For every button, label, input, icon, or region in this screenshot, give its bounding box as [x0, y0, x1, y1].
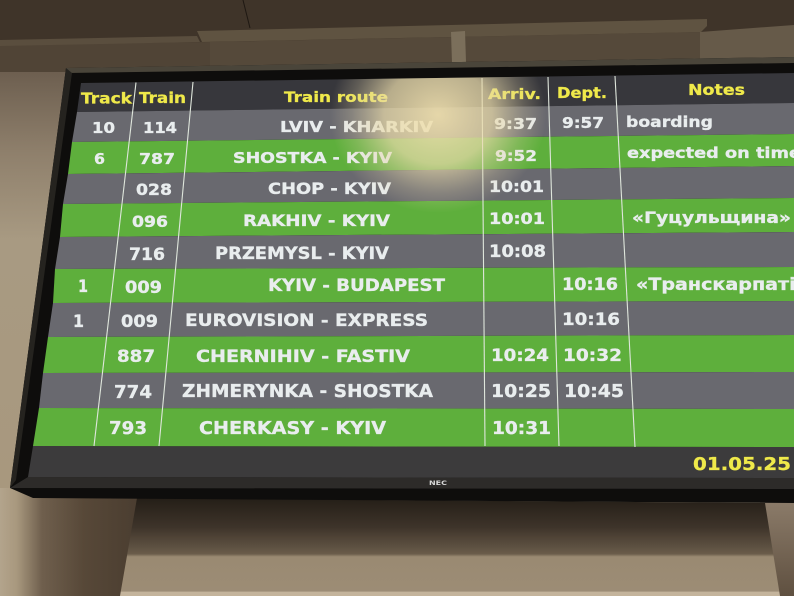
header row: Train — [139, 89, 186, 107]
row 4: 10:01 — [489, 209, 545, 228]
row 3: 028 — [136, 180, 172, 199]
ceiling seam — [243, 0, 250, 28]
header row — [77, 73, 794, 112]
row 5: 716 — [129, 245, 165, 264]
row 9: 10:45 — [564, 382, 624, 402]
row 1: 9:57 — [562, 114, 604, 132]
row 10: 793 — [109, 418, 147, 439]
row 1: 114 — [143, 119, 177, 137]
row 2: 787 — [139, 150, 175, 168]
row 4: RAKHIV - KYIV — [243, 211, 391, 230]
header row: Arriv. — [488, 87, 541, 103]
lower left wall in shadow — [0, 488, 140, 596]
row 1: LVIV - KHARKIV — [280, 118, 433, 136]
row 7: 009 — [121, 312, 158, 332]
row 6: «Транскарпаті» — [636, 275, 794, 294]
row 10: CHERKASY - KYIV — [199, 418, 386, 439]
board table — [33, 73, 794, 447]
row 4: «Гуцульщина» — [632, 208, 791, 227]
header row: Notes — [688, 81, 745, 99]
row 1 — [72, 103, 794, 142]
row 5 — [55, 232, 794, 269]
ceiling — [0, 0, 794, 46]
row 1: boarding — [626, 113, 713, 131]
brand logo: NEC — [429, 479, 447, 487]
row 8: 887 — [117, 347, 155, 367]
row 3: CHOP - KYIV — [268, 179, 392, 198]
row 9: 10:25 — [491, 382, 551, 402]
row 1: 10 — [92, 119, 115, 137]
bracket — [451, 31, 466, 63]
row 2: 6 — [94, 150, 105, 168]
row 5: PRZEMYSL - KYIV — [215, 244, 389, 263]
date: 01.05.25 — [693, 454, 791, 475]
row 6: 1 — [78, 277, 88, 296]
lower wall panel — [120, 498, 780, 596]
row 1: 9:37 — [494, 115, 537, 133]
row 4 — [60, 198, 794, 237]
row 10: 10:31 — [492, 418, 551, 439]
row 7: 10:16 — [562, 310, 620, 330]
row 2: expected on time — [627, 144, 794, 162]
row 7: EUROVISION - EXPRESS — [185, 311, 428, 331]
row 5: 10:08 — [489, 242, 546, 261]
row 2: SHOSTKA - KYIV — [233, 149, 392, 167]
screen glare — [334, 76, 541, 208]
monitor bezel — [10, 57, 794, 503]
row 7 — [48, 301, 794, 337]
header row: Track — [81, 90, 133, 108]
column divider lines — [94, 76, 635, 447]
right wall — [760, 500, 794, 596]
row 8: 10:32 — [563, 346, 622, 366]
header row: Dept. — [557, 84, 607, 102]
header row: Train route — [284, 90, 388, 106]
right upper wall — [700, 25, 794, 62]
row 8 — [43, 335, 794, 373]
row 8: CHERNIHIV - FASTIV — [196, 347, 411, 367]
row 9: ZHMERYNKA - SHOSTKA — [182, 382, 433, 402]
row 6 — [53, 267, 794, 303]
valance — [197, 19, 707, 42]
row 9 — [39, 372, 794, 409]
row 2: 9:52 — [495, 147, 537, 165]
row 9: 774 — [114, 383, 152, 403]
mounting panel — [210, 32, 700, 67]
upper wall band — [0, 42, 210, 72]
row 6: KYIV - BUDAPEST — [268, 276, 446, 295]
row 4: 096 — [132, 212, 168, 231]
lower info strip — [28, 446, 794, 478]
upper left wall — [0, 68, 100, 498]
row 7: 1 — [73, 312, 84, 332]
cable trunk left — [0, 36, 200, 46]
row 10 — [33, 408, 794, 447]
row 2 — [68, 134, 794, 174]
row 8: 10:24 — [491, 346, 549, 366]
row 3 — [63, 166, 794, 204]
row 6: 009 — [125, 278, 162, 297]
row 3: 10:01 — [489, 177, 544, 196]
row 6: 10:16 — [562, 275, 618, 294]
